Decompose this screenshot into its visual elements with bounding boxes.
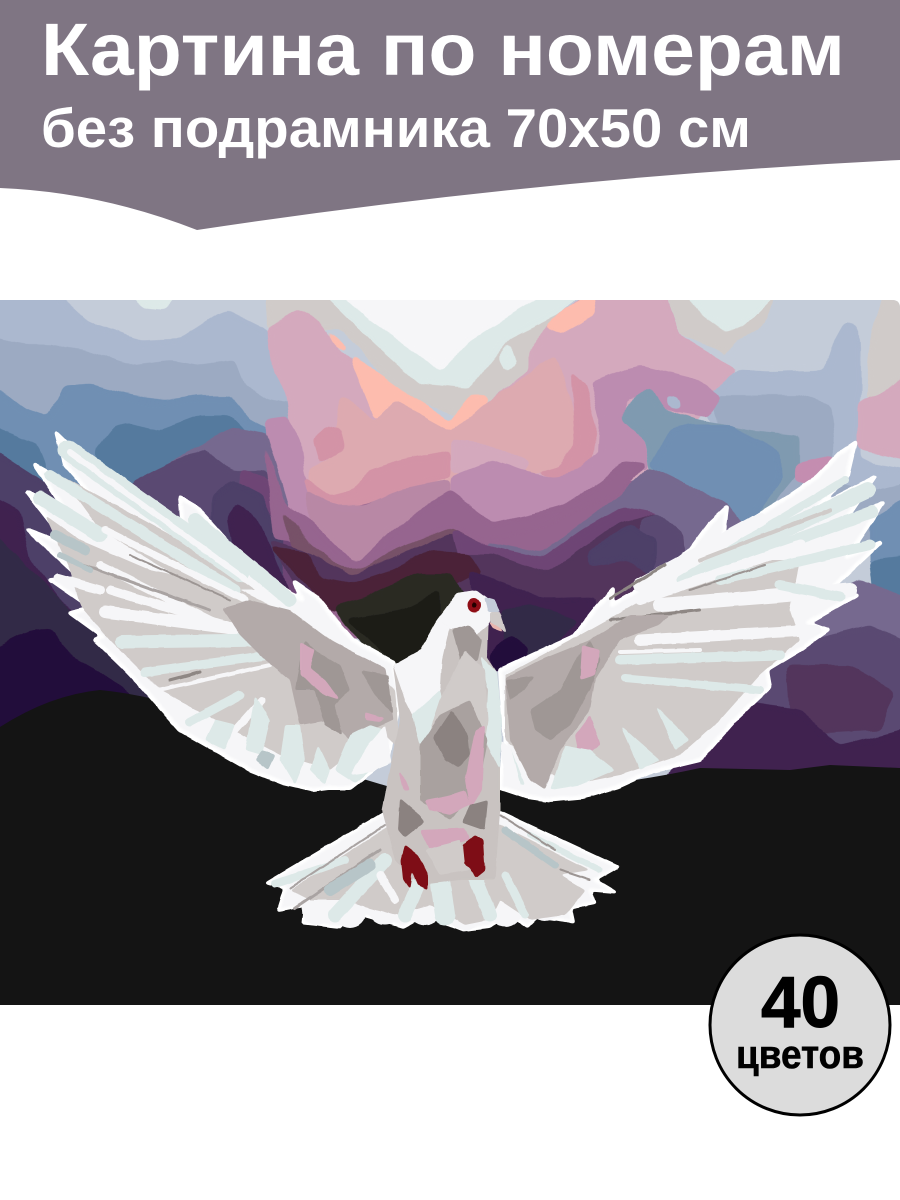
- dove: [27, 433, 883, 930]
- right foot: [463, 835, 485, 878]
- subtitle: без подрамника 70х50 см: [41, 97, 751, 159]
- left lowland: [0, 629, 129, 727]
- left foot: [401, 845, 428, 890]
- badge: 40 colours: [710, 935, 890, 1115]
- badge caption: цветов: [736, 1033, 864, 1077]
- right lower purple: [814, 580, 900, 639]
- pink clouds: [267, 300, 736, 490]
- badge number: 40: [761, 963, 840, 1043]
- cere and beak: [484, 597, 500, 612]
- central ridges: [264, 451, 645, 561]
- tail: [267, 810, 618, 930]
- right wing: [500, 443, 883, 800]
- body: [382, 590, 507, 890]
- right clouds: [668, 300, 773, 355]
- title: Картина по номерам: [41, 8, 845, 91]
- top centre: [266, 300, 558, 416]
- black foreground: [0, 690, 900, 1005]
- left purple: [0, 452, 82, 611]
- painting: dove on abstract sky: [0, 285, 900, 1005]
- header banner: [0, 0, 900, 230]
- left wing: [27, 433, 400, 790]
- left mountain: [170, 428, 288, 507]
- abstract sky and mountains: [0, 285, 900, 800]
- mid base behind clouds: [320, 480, 632, 639]
- eye: [467, 598, 481, 612]
